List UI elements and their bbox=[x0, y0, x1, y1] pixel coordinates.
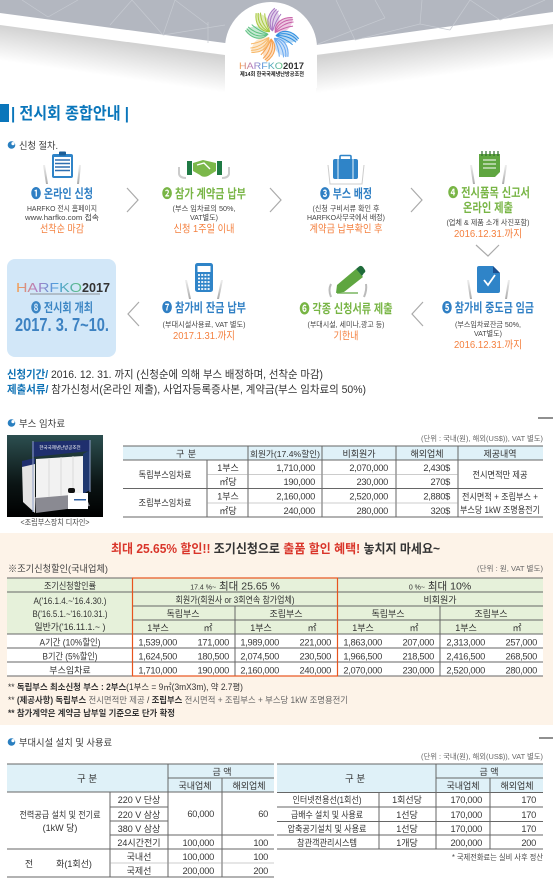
header row: 구 분 bbox=[77, 774, 97, 785]
price row A: 1,863,000 bbox=[343, 638, 382, 648]
price row A: 221,000 bbox=[299, 638, 331, 648]
row group: power supply: 220 V 삼상 bbox=[118, 810, 160, 820]
price row A: 1,989,000 bbox=[240, 638, 279, 648]
panel: early bird discount bbox=[0, 533, 553, 725]
label column bbox=[32, 581, 108, 676]
row group: telephone: 100 bbox=[253, 852, 268, 862]
footnote: * 국제전화료는 실비 사후 정산 bbox=[452, 852, 543, 862]
rows: assembled booth bbox=[138, 491, 540, 516]
header row: 구 분 bbox=[176, 449, 196, 459]
price row A: 2,313,000 bbox=[446, 638, 485, 648]
logo: HARFKO 2017: HARFKO bbox=[239, 61, 283, 71]
heading: application steps: 신청 절차. bbox=[19, 139, 58, 152]
arrow: step 3 to 4 bbox=[411, 188, 422, 212]
label column: A('16.1.4.~'16.4.30.) bbox=[34, 596, 106, 606]
price row B: 1,966,500 bbox=[343, 652, 382, 662]
data rows: 1선당 bbox=[396, 824, 418, 834]
data rows bbox=[288, 795, 536, 848]
arrow: step 7 to 8 bbox=[128, 302, 139, 326]
arrow: step 4 to 5 bbox=[476, 245, 499, 256]
row group: telephone: 국내선 bbox=[127, 852, 151, 862]
rows: independent booth: 독립부스임차료 bbox=[138, 469, 192, 480]
rows: independent booth: 190,000 bbox=[283, 477, 315, 487]
price row booth fee: 240,000 bbox=[299, 666, 331, 676]
step 6: documents submission: (부대시설, 세미나,광고 등) bbox=[308, 319, 385, 329]
non-member price header: 조립부스 bbox=[474, 609, 508, 619]
rows: independent booth: 전시면적만 제공 bbox=[472, 469, 528, 480]
rows: independent booth: 2,070,000 bbox=[349, 463, 388, 473]
step 2: contract deposit bbox=[162, 160, 246, 235]
step 1: online application bbox=[24, 152, 99, 235]
unit note: (단위 : 원, VAT 별도) bbox=[477, 564, 543, 573]
arrow: step 2 to 3 bbox=[270, 188, 281, 212]
non-member price header: ㎡ bbox=[512, 623, 522, 633]
member price header: 1부스 bbox=[147, 623, 169, 633]
row group: telephone: 전 bbox=[25, 859, 33, 869]
step 1: online application: www.harfko.com 접속 bbox=[24, 213, 99, 222]
icon: notepad bbox=[470, 151, 507, 184]
price row booth fee: 2,520,000 bbox=[446, 666, 485, 676]
label column: 조기신청할인률 bbox=[44, 581, 96, 591]
data rows: 1선당 bbox=[396, 810, 418, 820]
member price header: 독립부스 bbox=[166, 609, 200, 619]
icon: pencil bbox=[330, 266, 366, 297]
rows: assembled booth: 240,000 bbox=[283, 506, 315, 516]
label column: 부스임차료 bbox=[49, 664, 91, 676]
unit note: (단위 : 국내(원), 해외(US$)), VAT 별도) bbox=[421, 752, 543, 761]
label column: 일반가('16.11.1.~ ) bbox=[34, 622, 106, 632]
non-member price header: 독립부스 bbox=[371, 609, 405, 619]
data rows: 170,000 bbox=[450, 824, 482, 834]
rows: independent booth: 2,430$ bbox=[423, 463, 451, 473]
step 1: online application: HARFKO 전시 홈페이지 bbox=[27, 203, 97, 213]
header row: 해외업체 bbox=[500, 780, 534, 791]
table: internet and utilities fees bbox=[277, 764, 543, 862]
row group: power supply: (1kW 당) bbox=[43, 823, 77, 833]
row group: power supply: 60,000 bbox=[187, 809, 214, 819]
icon: clipboard bbox=[43, 152, 81, 184]
subheading: ※조기신청할인(국내업체) bbox=[8, 563, 108, 575]
notes bbox=[8, 681, 348, 718]
notes: ** 참가계약은 계약금 납부일 기준으로 단가 확정 bbox=[8, 707, 175, 718]
step 3: booth allocation bbox=[307, 156, 385, 235]
rows: assembled booth: ㎡당 bbox=[219, 506, 237, 516]
row group: power supply: 100 bbox=[253, 838, 268, 848]
notes: ** 독립부스 최소신청 부스 : 2부스(1부스 = 9㎡(3mX3m), 약 2.7평) bbox=[8, 681, 243, 692]
step 7: balance payment: ❼ 참가비 잔금 납부 bbox=[162, 300, 246, 315]
arrow: step 1 to 2 bbox=[127, 188, 138, 212]
table: early discount bbox=[7, 578, 543, 676]
step 7: balance payment: 2017.1.31.까지 bbox=[173, 330, 235, 342]
title: | 전시회 종합안내 | bbox=[11, 104, 129, 123]
arrow: step 5 to 6 bbox=[412, 302, 423, 326]
row group: telephone: 화(1회선) bbox=[56, 859, 92, 869]
data rows: 200,000 bbox=[450, 838, 482, 848]
header row: 비회원가 bbox=[342, 449, 376, 459]
label column: B('16.5.1.~'16.10.31.) bbox=[32, 609, 108, 619]
icon: handshake bbox=[179, 160, 229, 178]
step 8: exhibition opening panel bbox=[7, 259, 116, 357]
non-member price header: 1부스 bbox=[455, 623, 477, 633]
step 6: documents submission: 기한내 bbox=[334, 330, 358, 342]
text block: application period and documents: 제출서류/ 참가신청서(온라인 제출), 사업자등록증사본, 계약금(부스 임차료의 50%) bbox=[7, 382, 366, 396]
step 2: contract deposit: ❷ 참가 계약금 납부 bbox=[162, 186, 246, 201]
icon: checked document bbox=[467, 266, 510, 299]
rows: assembled booth: 부스당 1kW 조명용전기 bbox=[460, 505, 540, 515]
rows: independent booth: 270$ bbox=[431, 477, 451, 487]
rows: assembled booth: 2,160,000 bbox=[276, 492, 315, 502]
rows: assembled booth: 280,000 bbox=[356, 506, 388, 516]
price row A: 207,000 bbox=[402, 638, 434, 648]
header row: 회원가(17.4%할인) bbox=[250, 449, 320, 459]
member price header: 17.4 %~ 최대 25.65 % bbox=[190, 580, 280, 592]
data rows: 압축공기설치 및 사용료 bbox=[288, 823, 366, 834]
non-member price header: 0 %~ 최대 10% bbox=[409, 580, 471, 592]
label column: A기간 (10%할인) bbox=[40, 638, 100, 648]
step 4: exhibit item report: (업체 & 제품 소개 사진포함) bbox=[446, 217, 530, 227]
header row: 국내업체 bbox=[446, 781, 480, 791]
header row: 해외업체 bbox=[410, 448, 444, 459]
price row B: 180,500 bbox=[197, 652, 229, 662]
price row booth fee: 1,710,000 bbox=[138, 666, 177, 676]
row group: telephone: 200,000 bbox=[182, 866, 214, 876]
data rows: 1회선당 bbox=[392, 795, 422, 805]
price row booth fee: 190,000 bbox=[197, 666, 229, 676]
row group: telephone: 200 bbox=[253, 866, 268, 876]
step 8: exhibition opening panel: ❽ 전시회 개최 bbox=[31, 301, 93, 315]
header row: 금 액 bbox=[212, 766, 232, 777]
header row: 제공내역 bbox=[483, 449, 517, 459]
data rows: 170 bbox=[521, 824, 536, 834]
data rows: 인터넷전용선(1회선) bbox=[292, 795, 362, 805]
row group: telephone: 100,000 bbox=[182, 852, 214, 862]
price row B: 1,624,500 bbox=[138, 652, 177, 662]
price row A: 171,000 bbox=[197, 638, 229, 648]
step 3: booth allocation: HARFKO사무국에서 배정) bbox=[307, 212, 385, 222]
step 6: documents submission bbox=[300, 266, 392, 342]
icon: briefcase bbox=[328, 156, 364, 184]
price row booth fee: 2,160,000 bbox=[240, 666, 279, 676]
price row booth fee bbox=[138, 666, 537, 676]
price row A: 1,539,000 bbox=[138, 638, 177, 648]
data rows: 170,000 bbox=[450, 795, 482, 805]
data rows: 170,000 bbox=[450, 810, 482, 820]
step 8: exhibition opening panel: 2017 bbox=[82, 281, 110, 295]
booth photo: 한국국제냉난방공조전 bbox=[39, 444, 81, 451]
row group: power supply: 380 V 삼상 bbox=[118, 824, 160, 834]
logo: HARFKO 2017: 제14회 한국국제냉난방공조전 bbox=[240, 70, 304, 78]
table: booth rental fee bbox=[123, 434, 543, 517]
step 8: exhibition opening panel: HARFKO bbox=[16, 281, 82, 295]
step 1: online application: ❶ 온라인 신청 bbox=[31, 186, 93, 201]
member price header: ㎡ bbox=[307, 623, 317, 633]
step 2: contract deposit: VAT별도) bbox=[190, 212, 218, 222]
data rows: 급배수 설치 및 사용료 bbox=[291, 809, 363, 820]
rows: assembled booth: 2,880$ bbox=[423, 492, 451, 502]
data rows: 1개당 bbox=[396, 838, 418, 848]
label column: B기간 (5%할인) bbox=[42, 652, 98, 662]
header row: 금 액 bbox=[479, 766, 499, 777]
step 1: online application: 선착순 마감 bbox=[40, 223, 84, 235]
heading: application steps bbox=[8, 139, 58, 152]
member price header bbox=[147, 580, 317, 633]
rows: assembled booth: 조립부스임차료 bbox=[138, 497, 192, 508]
non-member price header: ㎡ bbox=[409, 623, 419, 633]
step 4: exhibit item report bbox=[446, 151, 530, 240]
step 8: exhibition opening panel: 2017. 3. 7~10. bbox=[15, 314, 109, 335]
row group: telephone bbox=[25, 852, 268, 876]
heading: booth rental fee: 부스 임차료 bbox=[19, 417, 65, 430]
headline: 최대 25.65% 할인!! 조기신청으로 출품 할인 혜택! 놓치지 마세요~ bbox=[111, 541, 440, 556]
heading: ancillary facilities bbox=[8, 737, 553, 749]
step 4: exhibit item report: 2016.12.31.까지 bbox=[454, 228, 522, 240]
step 2: contract deposit: (부스 임차료의 50%, bbox=[172, 203, 236, 213]
text block: application period and documents bbox=[7, 367, 366, 396]
step 6: documents submission: ❻ 각종 신청서류 제출 bbox=[300, 301, 392, 316]
price row B: 268,500 bbox=[505, 652, 537, 662]
member price header: 1부스 bbox=[250, 623, 272, 633]
row group: power supply: 24시간전기 bbox=[117, 838, 161, 848]
header row bbox=[345, 766, 534, 791]
data rows: 200 bbox=[521, 838, 536, 848]
table: power and phone fees bbox=[7, 764, 274, 877]
data rows: 참관객관리시스템 bbox=[297, 837, 357, 848]
price row B: 230,500 bbox=[299, 652, 331, 662]
row group: telephone: 국제선 bbox=[127, 866, 151, 876]
price row B bbox=[138, 652, 537, 662]
step 4: exhibit item report: 온라인 제출 bbox=[463, 200, 513, 215]
data rows: 170 bbox=[521, 810, 536, 820]
step 5: interim payment: (부스임차료잔금 50%, bbox=[455, 319, 521, 329]
step 5: interim payment: VAT별도) bbox=[474, 328, 502, 338]
rows: assembled booth: 320$ bbox=[431, 506, 451, 516]
step 4: exhibit item report: ❹ 전시품목 신고서 bbox=[448, 186, 530, 200]
rows: assembled booth: 전시면적 + 조립부스 + bbox=[462, 491, 538, 502]
table: booth rental fee: (단위 : 국내(원), 해외(US$)), VAT 별도) bbox=[421, 434, 543, 443]
row group: power supply bbox=[20, 795, 268, 848]
row group: power supply: 100,000 bbox=[182, 838, 214, 848]
price row B: 218,500 bbox=[402, 652, 434, 662]
step 5: interim payment bbox=[442, 266, 534, 351]
non-member price header: 1부스 bbox=[352, 623, 374, 633]
price row A: 257,000 bbox=[505, 638, 537, 648]
step 3: booth allocation: ❸ 부스 배정 bbox=[320, 187, 372, 201]
notes: ** (제공사항) 독립부스 전시면적만 제공 / 조립부스 전시면적 + 조립부스 + 부스당 1kW 조명용전기 bbox=[8, 694, 348, 705]
header row bbox=[176, 448, 517, 459]
rows: independent booth: 1,710,000 bbox=[276, 463, 315, 473]
rows: assembled booth: 2,520,000 bbox=[349, 492, 388, 502]
header row: 구 분 bbox=[345, 774, 365, 785]
member price header: 조립부스 bbox=[269, 609, 303, 619]
step 2: contract deposit: 신청 1주일 이내 bbox=[174, 222, 234, 235]
step 3: booth allocation: (신청 구비서류 확인 후 bbox=[312, 203, 380, 213]
step 7: balance payment bbox=[162, 263, 246, 342]
heading: ancillary facilities: 부대시설 설치 및 사용료 bbox=[19, 737, 112, 749]
member price header: 회원가(회원사 or 3회연속 참가업체) bbox=[176, 595, 294, 605]
price row booth fee: 2,070,000 bbox=[343, 666, 382, 676]
heading: booth rental fee bbox=[8, 417, 553, 430]
price row A bbox=[138, 638, 537, 648]
member price header: ㎡ bbox=[203, 623, 213, 633]
rows: independent booth: 1부스 bbox=[217, 463, 239, 473]
row group: power supply: 전력공급 설치 및 전기료 bbox=[20, 809, 100, 820]
data rows: 170 bbox=[521, 795, 536, 805]
booth photo bbox=[7, 435, 103, 517]
rows: independent booth: ㎡당 bbox=[219, 477, 237, 487]
row group: power supply: 220 V 단상 bbox=[118, 795, 160, 805]
header row bbox=[77, 766, 266, 791]
header row: 국내업체 bbox=[178, 781, 212, 791]
step 7: balance payment: (부대시설사용료, VAT 별도) bbox=[162, 319, 246, 329]
logo: HARFKO 2017: 2017 bbox=[283, 61, 304, 71]
price row booth fee: 230,000 bbox=[402, 666, 434, 676]
step 5: interim payment: 2016.12.31.까지 bbox=[454, 339, 522, 351]
rows: independent booth bbox=[138, 463, 528, 487]
row group: power supply: 60 bbox=[258, 809, 268, 819]
non-member price header bbox=[352, 580, 522, 633]
icon: calculator bbox=[185, 263, 223, 299]
photo caption: <조립부스장치 디자인> bbox=[20, 517, 90, 527]
header row: 해외업체 bbox=[232, 780, 266, 791]
page header banner bbox=[0, 0, 553, 95]
step 3: booth allocation: 계약금 납부확인 후 bbox=[310, 222, 383, 235]
rows: independent booth: 230,000 bbox=[356, 477, 388, 487]
rows: assembled booth: 1부스 bbox=[217, 492, 239, 502]
price row B: 2,416,500 bbox=[446, 652, 485, 662]
price row B: 2,074,500 bbox=[240, 652, 279, 662]
non-member price header: 비회원가 bbox=[423, 595, 457, 605]
logo: HARFKO 2017 bbox=[239, 7, 304, 78]
price row booth fee: 280,000 bbox=[505, 666, 537, 676]
text block: application period and documents: 신청기간/ 2016. 12. 31. 까지 (신청순에 의해 부스 배정하며, 선착순 마감) bbox=[7, 367, 323, 381]
